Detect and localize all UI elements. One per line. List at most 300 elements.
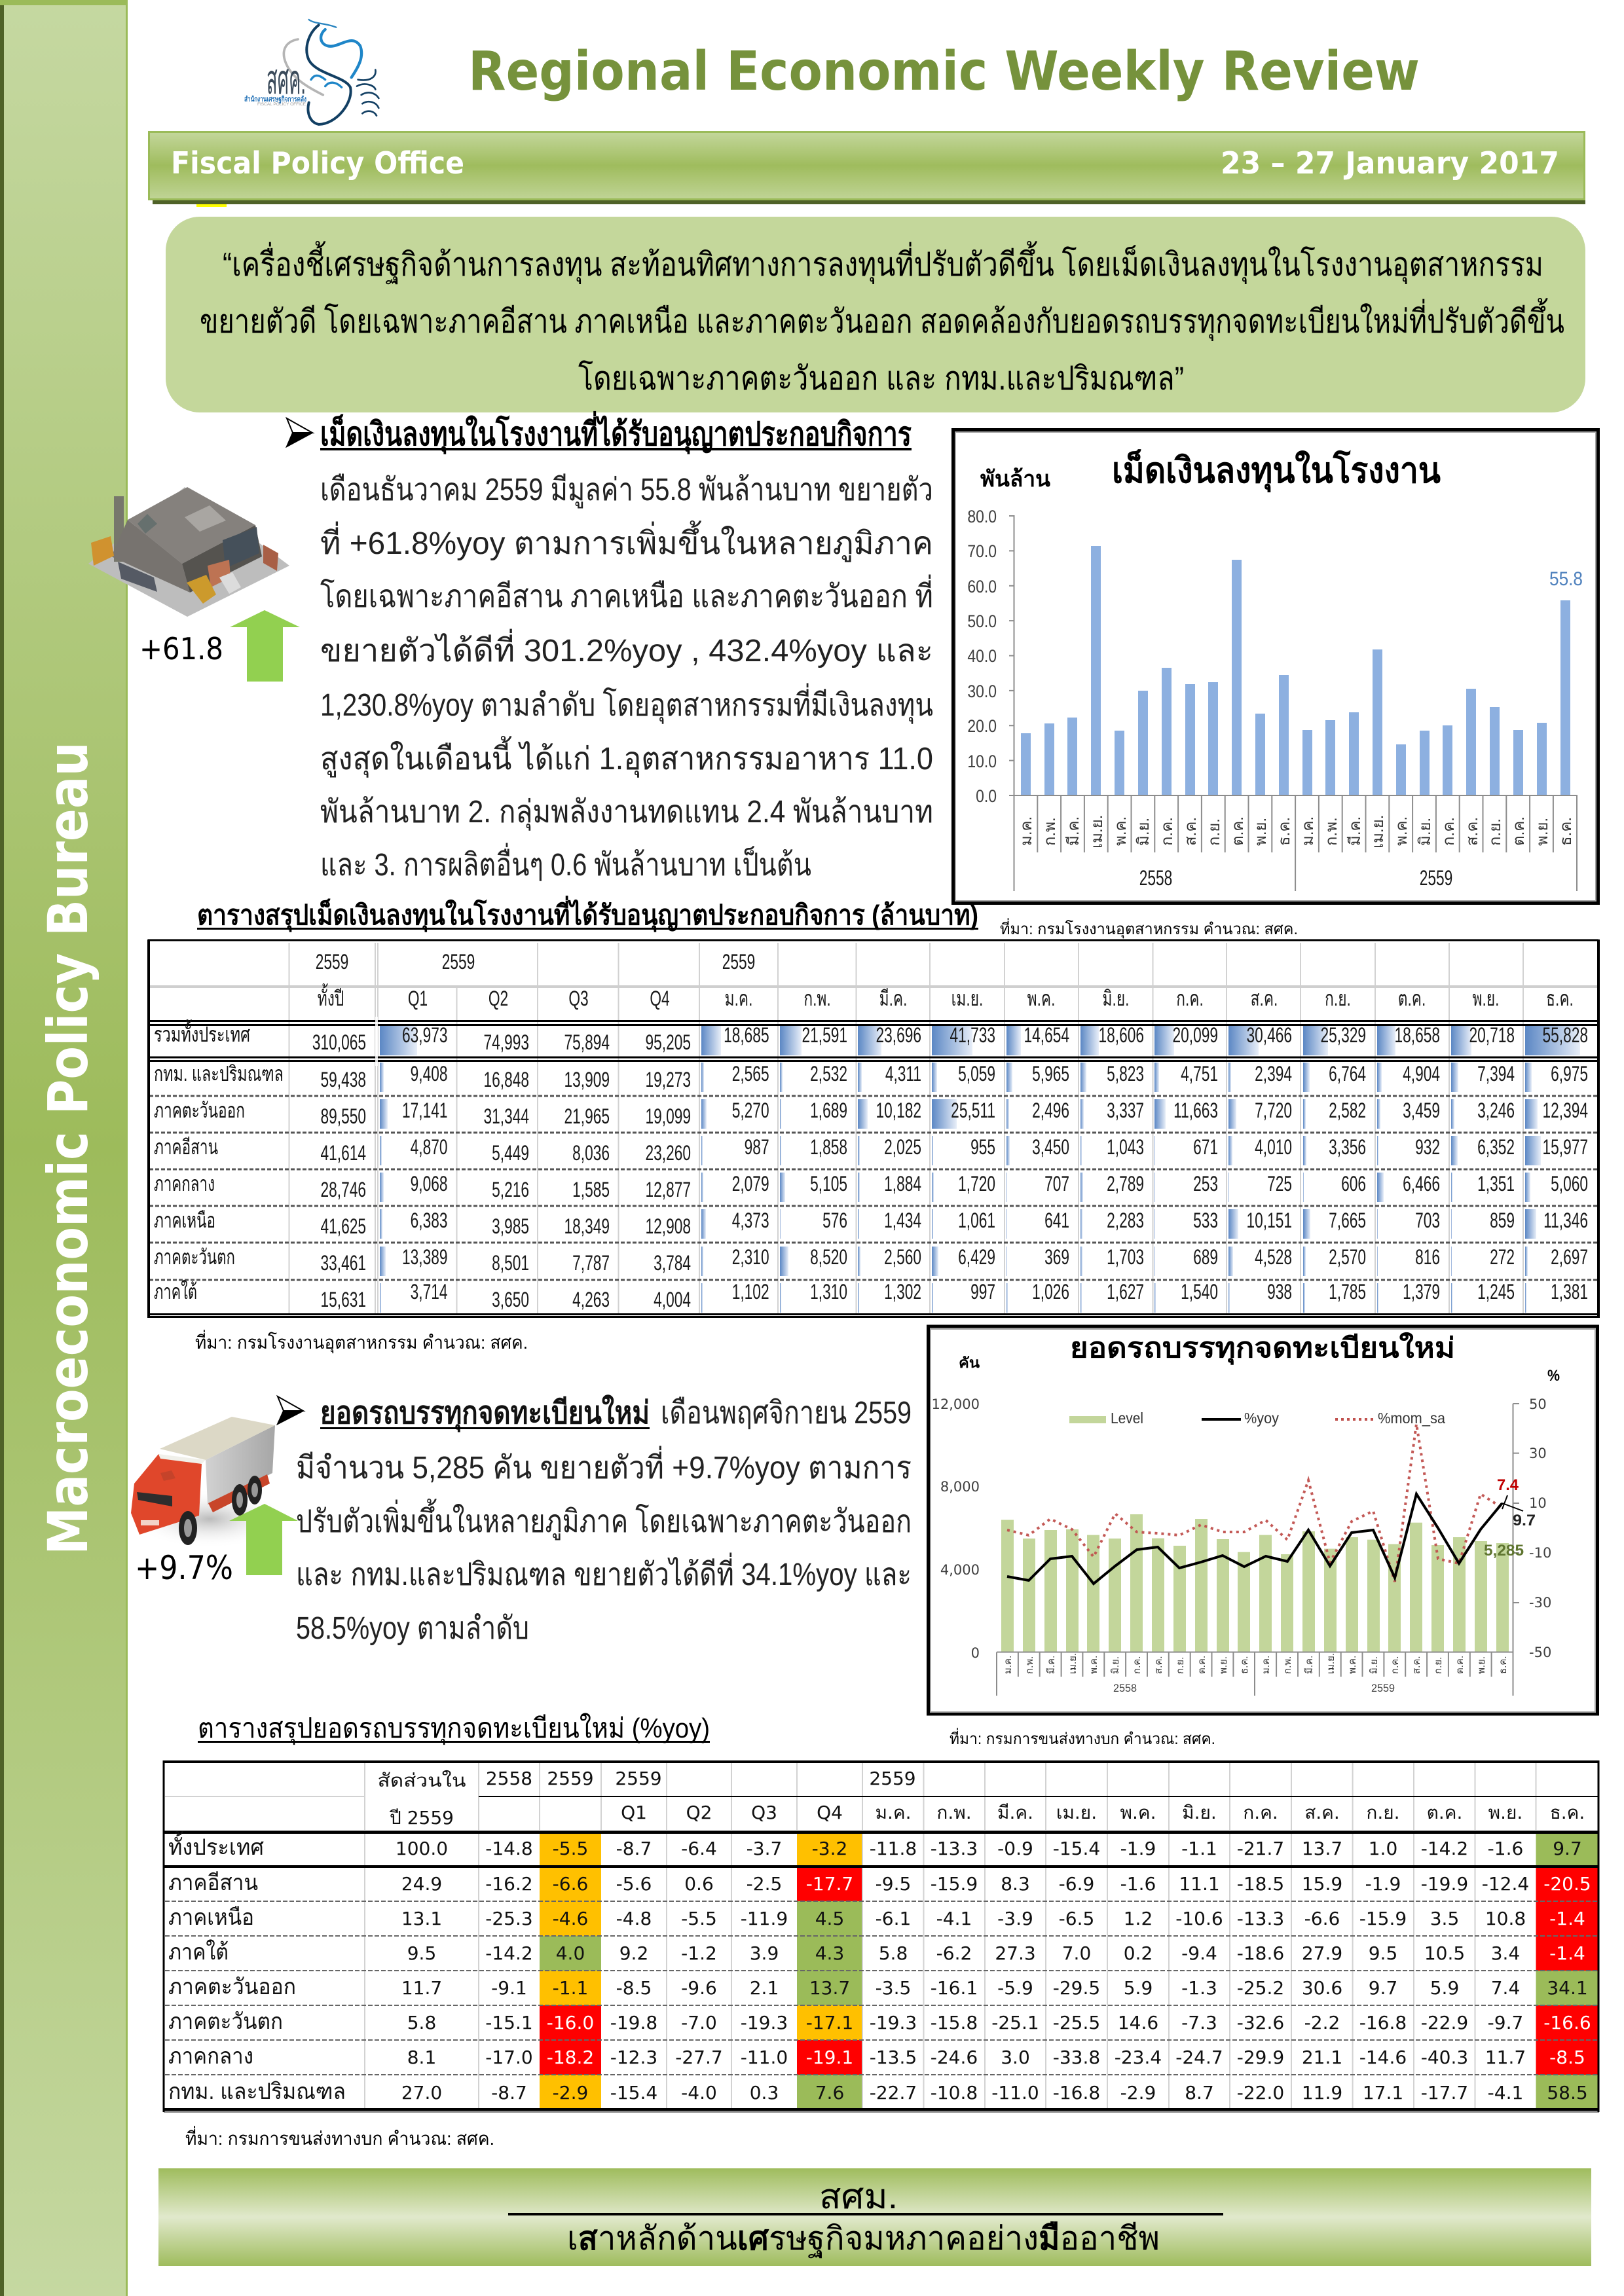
axes [997,1404,1519,1696]
table 1 region labels: ภาคใต้ [154,1280,197,1303]
table 1 values: 6,466 [1403,1172,1440,1195]
table 2 values: -25.1 [991,2012,1039,2033]
y-axis labels: 50.0 [967,611,997,631]
table 2 values: 9.7 [1553,1838,1582,1859]
month labels: พ.ค. [1112,816,1130,846]
table 1 values: 703 [1415,1209,1440,1232]
table 1 header: Q2 [489,987,508,1010]
left unit: คัน [959,1355,980,1371]
body text: factory investment: ที่ +61.8%yoy ตามการเพิ่มขึ้นในหลายภูมิภาค [320,520,933,562]
table 2 header: 2559 [869,1768,916,1789]
table 2 values: -15.8 [931,2012,978,2033]
month labels: เม.ย. [1325,1653,1337,1674]
table 2 values: -22.9 [1421,2012,1468,2033]
table 2 values: 30.6 [1302,1977,1342,1999]
table 2 values: 24.9 [401,1873,442,1895]
table 2 values: -19.8 [610,2012,657,2033]
body text: factory investment: และ 3. การผลิตอื่นๆ 0.6 พันล้านบาท เป็นต้น [320,843,811,883]
table 1 region labels [154,1019,284,1303]
year labels: 2559 [1420,866,1452,890]
y-axis labels [932,1396,1551,1661]
month labels [1003,1653,1509,1674]
y-axis labels: 30.0 [967,682,997,701]
table 1 values: 2,560 [884,1245,921,1269]
y-axis labels: 30 [1529,1446,1547,1461]
table 2 values: -9.4 [1181,1942,1217,1964]
table 2 values: 0.6 [684,1873,714,1895]
table 1 region labels: รวมทั้งประเทศ [154,1019,250,1046]
data label: 55.8 [1549,568,1583,590]
table 1 values: 3,459 [1403,1099,1440,1122]
table 2 values: -23.4 [1115,2047,1162,2068]
month labels: ก.พ. [1282,1656,1293,1674]
table 1 region labels: ภาคตะวันตก [154,1245,235,1269]
chart: truck registrations: 2559 [1371,1682,1395,1694]
table 1 values: 369 [1044,1245,1069,1269]
table 1 header: Q3 [568,987,589,1010]
table 1 values: 2,532 [810,1062,847,1085]
month labels: มี.ค. [1304,1656,1315,1674]
table 1 values: 10,151 [1246,1209,1292,1232]
table 2 values: -22.7 [870,2082,917,2104]
table 2 values: -11.8 [870,1838,917,1859]
table 2 values: -5.6 [616,1873,652,1895]
month labels: พ.ย. [1218,1656,1229,1674]
table 2 values: -9.6 [681,1977,717,1999]
table 2 values: -18.6 [1237,1942,1284,1964]
month labels: ธ.ค. [1557,817,1575,846]
body text: factory investment: พันล้านบาท 2. กลุ่มพลังงานทดแทน 2.4 พันล้านบาท [320,795,933,831]
icon: factory [88,487,289,617]
year labels: 2558 [1113,1682,1137,1694]
table 2 header: มิ.ย. [1182,1802,1217,1823]
table 1 values: 1,689 [810,1099,847,1122]
table 2 values: 7.0 [1062,1942,1091,1964]
table 1 values: 19,099 [645,1104,691,1128]
table 2 values: -6.9 [1059,1873,1094,1895]
table 2 values: -16.1 [931,1977,978,1999]
table 1 values: 6,352 [1477,1135,1515,1159]
table 2 values: -1.2 [681,1942,717,1964]
table 1 header: 2559 [722,950,755,974]
year labels: 2558 [1139,866,1172,890]
table 2 values: 5.8 [407,2012,436,2033]
month labels: ก.พ. [1323,817,1340,846]
table 1 values: 11,346 [1543,1209,1588,1232]
table 2 title: ตารางสรุปยอดรถบรรทุกจดทะเบียนใหม่ (%yoy) [198,1713,710,1745]
table 1 values: 7,787 [572,1251,610,1275]
table 2 values: 21.1 [1302,2047,1342,2068]
table 1 values: 13,389 [402,1245,448,1269]
table 2 values: -9.7 [1488,2012,1523,2033]
month labels: เม.ย. [1369,815,1387,848]
month labels: มิ.ย. [1369,1656,1380,1674]
month labels: ก.ค. [1132,1656,1143,1674]
table 2 values: -4.8 [616,1908,652,1929]
table 1 values: 12,877 [645,1178,691,1201]
y-axis labels: 10.0 [967,752,997,771]
table 2 header: Q1 [621,1802,647,1823]
table 1 values: 3,650 [492,1288,529,1311]
banner [149,132,1585,207]
y-axis labels: 20.0 [967,716,997,736]
table 1 header [316,950,1574,1010]
table 1 values: 8,036 [572,1141,610,1165]
table 1 values: 41,614 [320,1141,366,1165]
table 2 values: -15.4 [1053,1838,1100,1859]
body text: truck registrations: มีจำนวน 5,285 คัน ขยายตัวที่ +9.7%yoy ตามการ [296,1446,912,1485]
table 1 values: 18,606 [1098,1023,1144,1047]
month labels: ธ.ค. [1239,1656,1250,1674]
table 1 values: 30,466 [1246,1023,1292,1047]
legend: Level [1111,1410,1143,1427]
table 1 values: 1,026 [1032,1280,1069,1303]
month labels: เม.ย. [1088,815,1106,848]
table 2 header [377,1768,1585,1829]
table 1 values: 4,373 [732,1209,769,1232]
y-axis labels: 12,000 [932,1396,980,1412]
table 1 values: 8,520 [810,1245,847,1269]
y-axis labels: 40.0 [967,646,997,666]
year labels [1139,866,1452,890]
table 2 values: -15.9 [1359,1908,1407,1929]
table 1 region labels: ภาคตะวันออก [154,1099,245,1122]
table 2 values: -4.6 [553,1908,588,1929]
table 2 values: 8.7 [1185,2082,1214,2104]
table 2 header: สัดส่วนใน [377,1770,466,1791]
table 1 values: 641 [1044,1209,1069,1232]
table 1 header: Q4 [650,987,670,1010]
table 2 values: -15.1 [485,2012,533,2033]
table 1 values: 4,528 [1255,1245,1292,1269]
table 2 values: -11.9 [741,1908,788,1929]
table 1 values: 1,858 [810,1135,847,1159]
table 1: factory investment by region [148,939,1598,1318]
table 2 values: 0.2 [1124,1942,1153,1964]
table 2 values: -9.1 [491,1977,527,1999]
quote panel [166,217,1585,412]
table 1 values: 272 [1490,1245,1515,1269]
table 2 values: -1.4 [1549,1908,1585,1929]
footer banner [158,2168,1591,2266]
month labels: มี.ค. [1065,816,1082,846]
table 2 values: 3.5 [1430,1908,1459,1929]
table 2 values: 3.9 [750,1942,779,1964]
table 2 values: 27.3 [995,1942,1036,1964]
annotation: 5,285: 5,285 [1484,1542,1524,1559]
table 2 values: -25.3 [485,1908,533,1929]
table 1 values: 33,461 [320,1251,366,1275]
table 2 values: -1.9 [1120,1838,1156,1859]
month labels: พ.ย. [1476,1656,1487,1674]
table 1 values: 7,665 [1329,1209,1366,1232]
table 1 values: 18,349 [564,1214,610,1238]
table 2 values: 4.0 [556,1942,585,1964]
table 2 values: -17.7 [1421,2082,1468,2104]
month labels: ส.ค. [1182,817,1200,846]
body text: factory investment: โดยเฉพาะภาคอีสาน ภาคเหนือ และภาคตะวันออก ที่ [320,574,933,614]
table 2 values: 3.4 [1491,1942,1520,1964]
month labels: ส.ค. [1464,817,1481,846]
table 1 values: 20,718 [1469,1023,1515,1047]
icon: truck [131,1417,288,1548]
body text: truck registrations: ปรับตัวเพิ่มขึ้นในหลายภูมิภาค โดยเฉพาะภาคตะวันออก [296,1499,912,1540]
table 1 values: 2,496 [1032,1099,1069,1122]
table 1 values: 2,025 [884,1135,921,1159]
footer heading: สศม. [819,2178,898,2216]
table 2 values: -10.6 [1175,1908,1223,1929]
month labels: มี.ค. [1046,1656,1057,1674]
table 1 header: มิ.ย. [1103,987,1129,1010]
table 2 values: 1.0 [1369,1838,1397,1859]
table 2 values: -14.8 [485,1838,533,1859]
body text: factory investment: สูงสุดในเดือนนี้ ได้แก่ 1.อุตสาหกรรมอาหาร 11.0 [320,736,933,778]
table 2 values: -8.7 [616,1838,652,1859]
heading: factory investment: เม็ดเงินลงทุนในโรงงานที่ได้รับอนุญาตประกอบกิจการ [320,411,912,454]
table 2 values: 1.2 [1124,1908,1153,1929]
table 1 values: 1,302 [884,1280,921,1303]
table 1 values: 21,591 [802,1023,847,1047]
table 1 values: 2,582 [1329,1099,1366,1122]
table 1 values: 1,245 [1477,1280,1515,1303]
table 1 values: 987 [745,1135,769,1159]
table 1 header: ธ.ค. [1546,987,1574,1010]
table 2 header: พ.ค. [1120,1802,1156,1823]
table 1 values: 10,182 [876,1099,921,1122]
table 2 values: -19.3 [741,2012,788,2033]
month labels: ก.พ. [1024,1656,1035,1674]
table 2 header: เม.ย. [1056,1802,1097,1823]
table 1 values: 2,394 [1255,1062,1292,1085]
table 2 values: -1.4 [1549,1942,1585,1964]
month labels: ส.ค. [1153,1656,1164,1674]
table 1 values: 3,784 [654,1251,691,1275]
table 2 values: -21.7 [1237,1838,1284,1859]
table 2 values: -19.9 [1421,1873,1468,1895]
table 2 values: 7.4 [1491,1977,1520,1999]
table 1 values: 859 [1490,1209,1515,1232]
table 2 values: -22.0 [1237,2082,1284,2104]
table 2 values: -16.8 [1359,2012,1407,2033]
table 2 values: 58.5 [1547,2082,1588,2104]
legend: %yoy [1244,1410,1279,1427]
heading: factory investment [320,411,912,454]
table 2 region labels: ภาคตะวันออก [168,1975,296,1999]
table 2 values: 11.7 [401,1977,442,1999]
table 2 values: -27.7 [675,2047,723,2068]
icon: green up arrow 2 [229,1504,298,1575]
table 2 values: -17.0 [485,2047,533,2068]
table 1 region labels: ภาคกลาง [154,1172,215,1195]
table 1 values: 1,627 [1107,1280,1144,1303]
body text: factory investment [320,473,933,883]
line: yoy [1007,1494,1502,1584]
table 2 values: 3.0 [1001,2047,1030,2068]
table 1 values: 74,993 [483,1030,529,1054]
table 2 values: -1.9 [1365,1873,1401,1895]
y-axis labels: -10 [1529,1545,1551,1561]
table 1 values: 21,965 [564,1104,610,1128]
logo [233,13,383,134]
table 2 header: ต.ค. [1427,1802,1462,1823]
table 1 values: 63,973 [402,1023,448,1047]
table 1 values: 955 [970,1135,995,1159]
table 1 values: 15,631 [320,1288,366,1311]
table 1 header: ก.ค. [1176,987,1204,1010]
y-axis unit: พันล้าน [980,467,1050,492]
table 2 header: ก.พ. [936,1802,972,1823]
table 2: truck registrations %yoy [164,1760,1599,2113]
table 2 values: 13.7 [809,1977,850,1999]
legend [1069,1410,1445,1427]
month labels: ก.ย. [1433,1657,1444,1674]
table 1 values: 41,625 [320,1214,366,1238]
table 2 values: -6.6 [553,1873,588,1895]
table 1 values: 6,429 [958,1245,995,1269]
table 1 values: 1,585 [572,1178,610,1201]
table 2 values: -25.5 [1053,2012,1100,2033]
month labels: ก.ย. [1206,818,1223,846]
table 2 values: -6.2 [936,1942,972,1964]
table 2 values: -18.5 [1237,1873,1284,1895]
month labels: เม.ย. [1067,1653,1079,1674]
table 2 values: 4.3 [815,1942,844,1964]
table 2 values: -32.6 [1237,2012,1284,2033]
table 2 values: -33.8 [1053,2047,1100,2068]
table 1 values: 1,720 [958,1172,995,1195]
logo: สำนักงานเศรษฐกิจการคลัง [244,95,306,104]
table 1 values: 3,246 [1477,1099,1515,1122]
table 1 header: ทั้งปี [318,984,344,1010]
table 2 values: 13.1 [401,1908,442,1929]
table 1 values: 1,379 [1403,1280,1440,1303]
table 1 values: 5,216 [492,1178,529,1201]
table 1 values: 1,102 [732,1280,769,1303]
body text: truck registrations: และ กทม.และปริมณฑล ขยายตัวได้ดีที่ 34.1%yoy และ [296,1552,912,1592]
table 1 region labels: ภาคเหนือ [154,1209,215,1232]
table 1 values: 4,311 [885,1062,921,1085]
table 2 values: -3.5 [876,1977,911,1999]
table 1 header: ม.ค. [725,987,752,1010]
table 1 header: พ.ค. [1027,987,1055,1010]
table 1 values: 9,408 [411,1062,448,1085]
table 2 region labels: ภาคตะวันตก [168,2009,283,2034]
y-axis labels [967,507,997,806]
table 1 values: 1,434 [884,1209,921,1232]
table 2 values: -7.0 [681,2012,717,2033]
table 2 values: -8.7 [491,2082,527,2104]
stat: +9.7%: +9.7% [135,1549,233,1587]
table 2 header: ก.ย. [1366,1802,1400,1823]
table 2 values: -2.5 [747,1873,782,1895]
table 2 values: 8.3 [1001,1873,1030,1895]
table 2 header: 2558 [486,1768,532,1789]
table 2 values: -15.4 [610,2082,657,2104]
table 2 values: 27.9 [1302,1942,1342,1964]
source: chart 2: ที่มา: กรมการขนส่งทางบก คำนวณ: สศค. [950,1728,1215,1748]
highlighted cells [540,1831,1598,2109]
table 2 values: 9.2 [619,1942,648,1964]
y-axis labels: 60.0 [967,577,997,596]
table 1 values: 1,351 [1477,1172,1515,1195]
table 1 values: 310,065 [312,1030,366,1054]
table 2 header: ปี 2559 [389,1807,454,1829]
table 1 values: 4,263 [572,1288,610,1311]
annotation: 7.4: 7.4 [1497,1476,1519,1494]
table 1 values: 5,060 [1551,1172,1588,1195]
table 1 values: 5,449 [492,1141,529,1165]
table 1 values: 2,570 [1329,1245,1366,1269]
table 1 values: 2,283 [1107,1209,1144,1232]
table 2 values: 11.7 [1485,2047,1526,2068]
icon: green up arrow 1 [230,610,300,682]
table 2 values: -15.9 [931,1873,978,1895]
table 2 values: -3.2 [812,1838,847,1859]
month labels: มิ.ย. [1416,818,1434,846]
table 2 values: -4.0 [681,2082,717,2104]
table 1 values: 19,273 [645,1068,691,1091]
table 2 values: 7.6 [815,2082,844,2104]
body text: factory investment: 1,230.8%yoy ตามลำดับ โดยอุตสาหกรรมที่มีเงินลงทุน [320,683,933,724]
table 1 values: 576 [822,1209,847,1232]
source: chart 1: ที่มา: กรมโรงงานอุตสาหกรรม คำนวณ: สศค. [1000,918,1298,939]
table 2 values: -3.7 [747,1838,782,1859]
month labels: พ.ย. [1534,818,1551,846]
table 1 values: 7,394 [1477,1062,1515,1085]
table 2 header: Q2 [686,1802,712,1823]
chart title: เม็ดเงินลงทุนในโรงงาน [1112,450,1441,493]
table 1 values: 4,751 [1181,1062,1218,1085]
table 1 values: 3,714 [411,1280,448,1303]
table 1 title: ตารางสรุปเม็ดเงินลงทุนในโรงงานที่ได้รับอนุญาตประกอบกิจการ (ล้านบาท) [197,896,978,932]
table 1 values: 41,733 [950,1023,995,1047]
table 1 values: 5,105 [810,1172,847,1195]
table 1 values: 1,540 [1181,1280,1218,1303]
month labels: ธ.ค. [1498,1656,1509,1674]
table 1 values: 23,696 [876,1023,921,1047]
table 1 values: 89,550 [320,1104,366,1128]
table 2 values: -12.3 [610,2047,657,2068]
table 1 values: 12,908 [645,1214,691,1238]
month labels: ธ.ค. [1276,817,1293,846]
table 2 region labels: ทั้งประเทศ [168,1831,264,1860]
y-axis labels: 50 [1529,1396,1547,1412]
table 2 values: -25.2 [1237,1977,1284,1999]
table 2 region labels [168,1831,346,2104]
table 1 values: 75,894 [564,1030,610,1054]
y-axis labels: -50 [1529,1645,1551,1660]
table 2 values: -20.5 [1543,1873,1591,1895]
table 1 region labels: ภาคอีสาน [154,1135,218,1159]
table 2 values: -7.3 [1181,2012,1217,2033]
y-axis labels: 0.0 [976,786,997,806]
table 1 values: 28,746 [320,1178,366,1201]
table 1 values: 5,270 [732,1099,769,1122]
table 1 values: 1,785 [1329,1280,1366,1303]
sidebar title: Macroeconomic Policy Bureau [36,742,100,1555]
month labels [1018,815,1575,848]
table 1 values: 253 [1193,1172,1218,1195]
table 1 values: 55,828 [1542,1023,1588,1047]
table 2 values: -19.1 [806,2047,853,2068]
table 2 values: -6.4 [681,1838,717,1859]
table 1 values: 18,658 [1394,1023,1440,1047]
table 2 values: -5.5 [681,1908,717,1929]
table 2 values: 100.0 [396,1838,448,1859]
table 2 values: -14.2 [1421,1838,1468,1859]
month labels: ก.พ. [1041,817,1059,846]
table 1 header: 2559 [442,950,475,974]
